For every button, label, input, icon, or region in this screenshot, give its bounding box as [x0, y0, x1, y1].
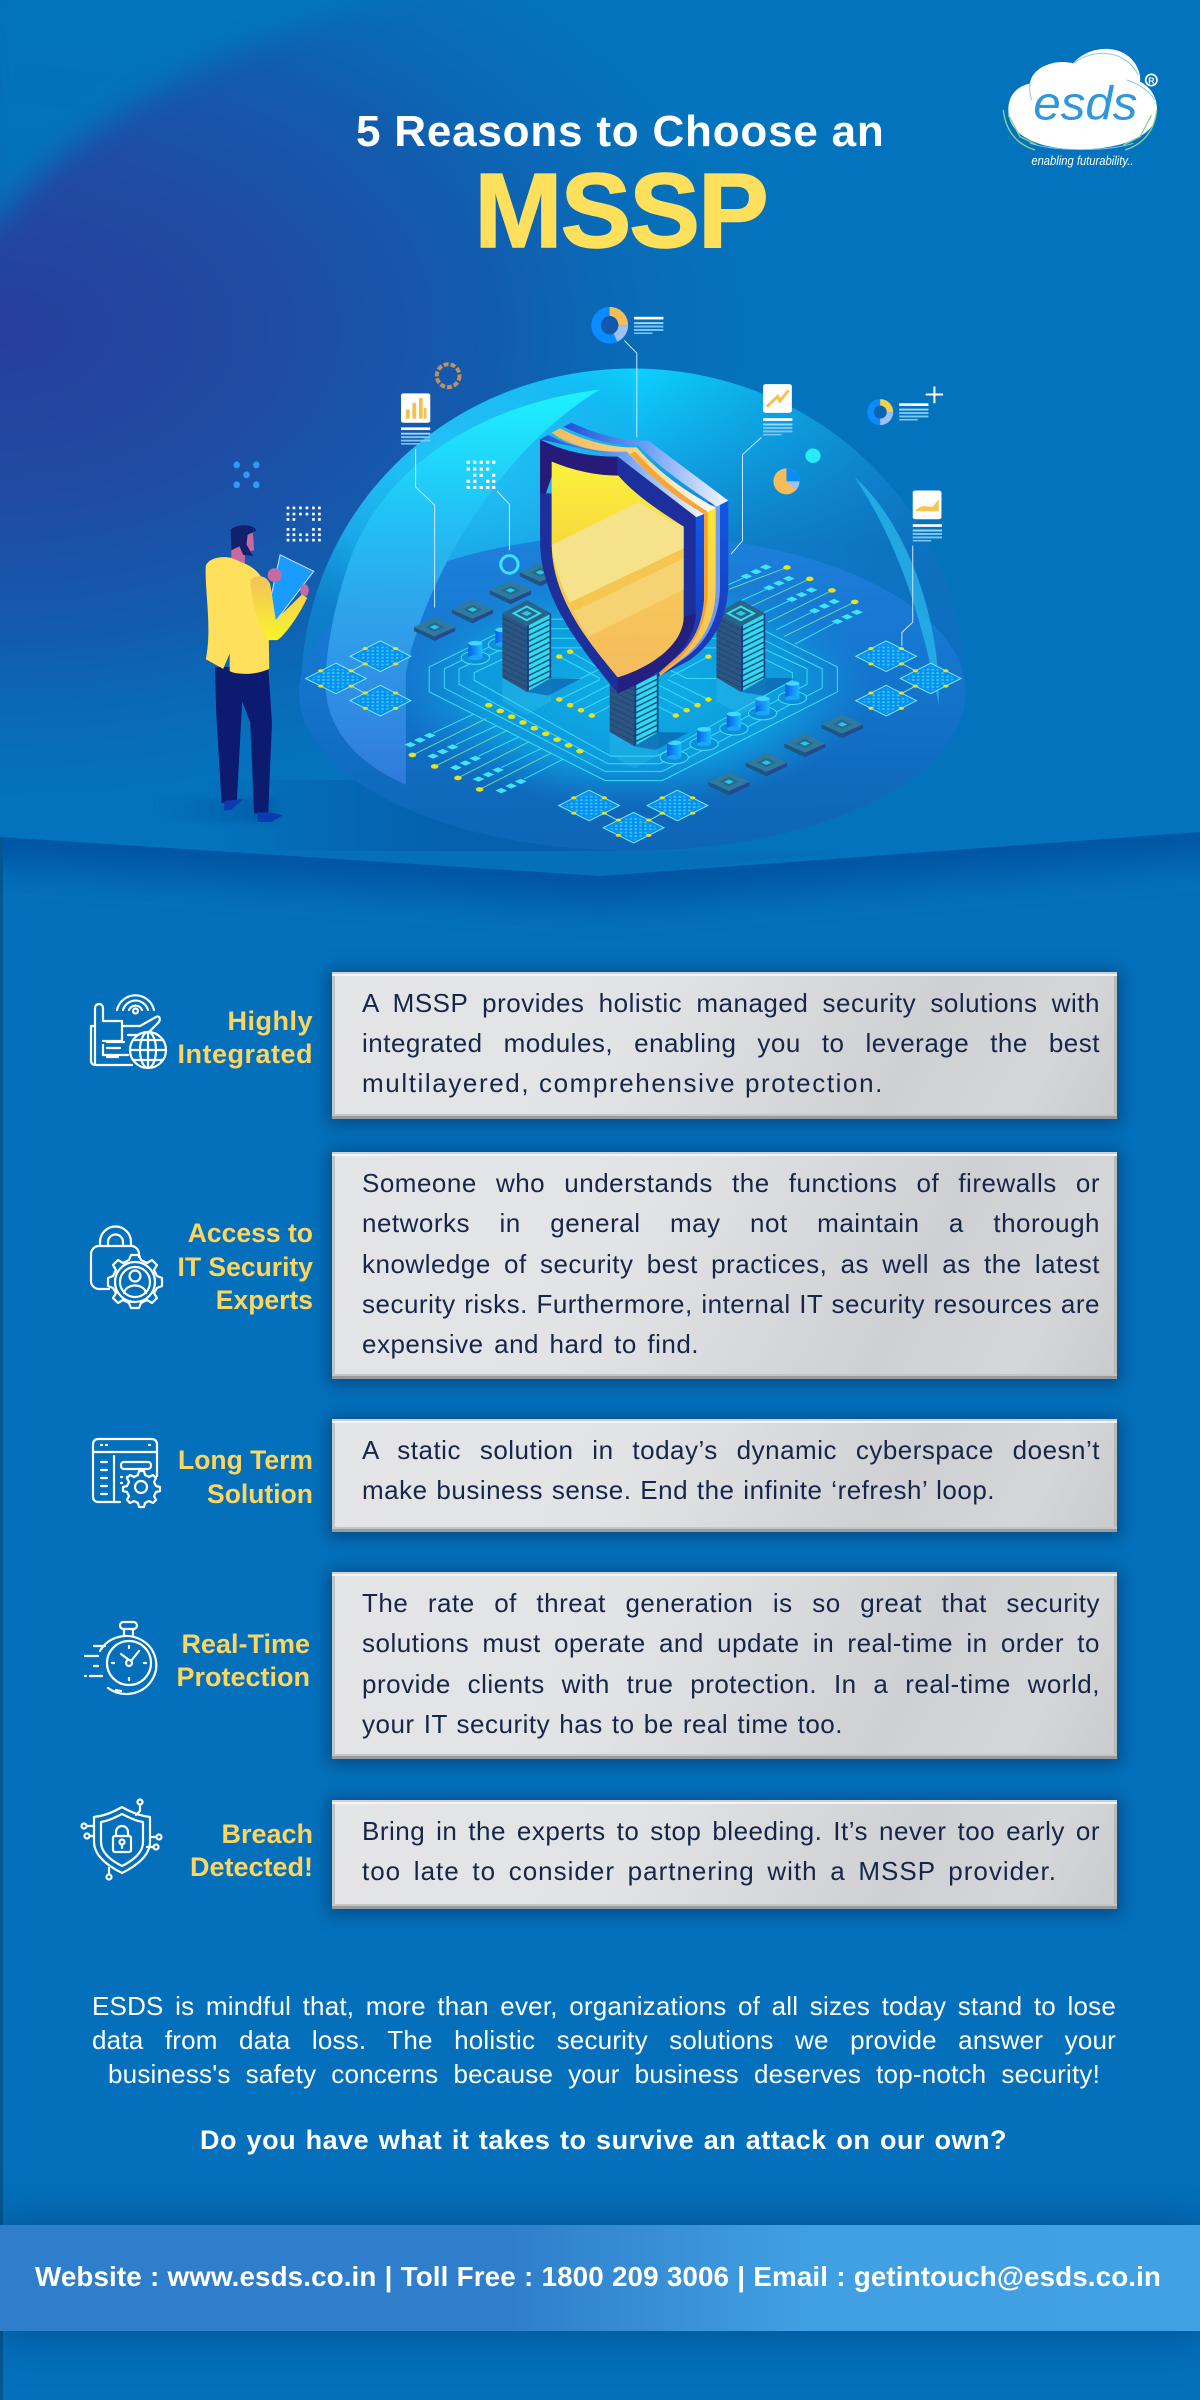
yellow solder dots	[409, 565, 859, 792]
row 3 label: Solution	[207, 1479, 313, 1509]
row 1 card: integrated modules, enabling you to leverage the best	[362, 1028, 1100, 1058]
row 4 card: provide clients with true protection. In a real-time world,	[362, 1669, 1100, 1699]
circuit board traces	[352, 567, 915, 820]
row 4 card: your IT security has to be real time too.	[362, 1709, 843, 1739]
logo: esds cloud	[1002, 48, 1158, 168]
row 2 label	[178, 1218, 313, 1315]
row 3 card: make business sense. End the infinite ‘refresh’ loop.	[362, 1475, 995, 1505]
row 2 label: Access to	[188, 1218, 313, 1248]
dome and scene	[299, 368, 966, 851]
closing paragraph: data from data loss. The holistic security solutions we provide answer your	[92, 2025, 1116, 2055]
row 2 card: networks in general may not maintain a thorough	[362, 1208, 1100, 1238]
row 3 label: Long Term	[178, 1445, 313, 1475]
data widgets	[233, 307, 943, 646]
shield	[540, 423, 728, 693]
row 4 card: solutions must operate and update in real-time in order to	[362, 1628, 1100, 1658]
row 1 label: Highly	[227, 1006, 313, 1036]
row 1 card: multilayered, comprehensive protection.	[362, 1068, 884, 1098]
row 5 label: Breach	[221, 1819, 313, 1849]
row 3 card	[332, 1419, 1117, 1532]
row 5 label: Detected!	[190, 1852, 313, 1882]
row 4 label	[176, 1629, 310, 1692]
row 2 label: IT Security	[178, 1252, 313, 1282]
row 5 card: too late to consider partnering with a MSSP provider.	[362, 1856, 1057, 1886]
cylinders	[461, 628, 806, 764]
row 1 card: A MSSP provides holistic managed security solutions with	[362, 988, 1100, 1018]
cyan signal blocks	[404, 564, 863, 793]
server towers	[502, 600, 795, 768]
row 5 card: Bring in the experts to stop bleeding. It’s never too early or	[362, 1816, 1100, 1846]
row 2 card: security risks. Furthermore, internal IT security resources are	[362, 1289, 1100, 1319]
widgets and man	[206, 307, 943, 822]
row 1 label: Integrated	[177, 1039, 313, 1069]
row 4 icon: stopwatch	[84, 1620, 158, 1696]
row 2 card: expensive and hard to find.	[362, 1329, 699, 1359]
man with tablet	[206, 525, 314, 822]
logo: esds cloud: R	[1148, 75, 1155, 85]
row 3 card: A static solution in today’s dynamic cyberspace doesn’t	[362, 1435, 1100, 1465]
illustration: shield dome with data centre and man	[206, 306, 966, 850]
row 4 label: Protection	[176, 1662, 310, 1692]
footer contact band	[0, 2225, 1200, 2331]
logo: esds cloud: esds	[1033, 77, 1137, 130]
row 2 label: Experts	[216, 1285, 313, 1315]
title: 5 Reasons to Choose an: 5 Reasons to Choose an	[356, 107, 885, 156]
row 2 icon: lock and user gear	[90, 1225, 164, 1310]
row 3 label	[178, 1445, 313, 1509]
chips	[414, 562, 863, 796]
question callout: Do you have what it takes to survive an attack on our own?	[200, 2125, 1007, 2155]
row 2 card: Someone who understands the functions of firewalls or	[362, 1168, 1100, 1198]
row 1 card	[332, 972, 1117, 1119]
row 1 label	[177, 1006, 313, 1069]
row 2 card: knowledge of security best practices, as well as the latest	[362, 1249, 1100, 1279]
logo: esds cloud: enabling futurability..	[1031, 154, 1133, 168]
footer contact band: Website : www.esds.co.in | Toll Free : 1800 209 3006 | Email : getintouch@esds.co.in	[35, 2261, 1161, 2292]
row 5 card	[332, 1800, 1117, 1909]
closing paragraph: ESDS is mindful that, more than ever, organizations of all sizes today stand to lose	[92, 1991, 1116, 2021]
row 4 label: Real-Time	[181, 1629, 310, 1659]
row 3 icon: window with gear	[92, 1438, 162, 1508]
title: MSSP: MSSP	[474, 152, 767, 270]
row 5 label	[190, 1819, 313, 1882]
glass dome	[299, 368, 966, 851]
row 4 card: The rate of threat generation is so great that security	[362, 1588, 1100, 1618]
row 4 card	[332, 1572, 1117, 1759]
closing paragraph: business's safety concerns because your business deserves top-notch security!	[108, 2059, 1100, 2089]
row 5 icon: shield lock with circuit nodes	[80, 1798, 163, 1881]
closing paragraph	[92, 1991, 1116, 2089]
row 1 icon: integrated	[90, 994, 168, 1070]
row 2 card	[332, 1152, 1117, 1379]
pads	[306, 641, 961, 843]
